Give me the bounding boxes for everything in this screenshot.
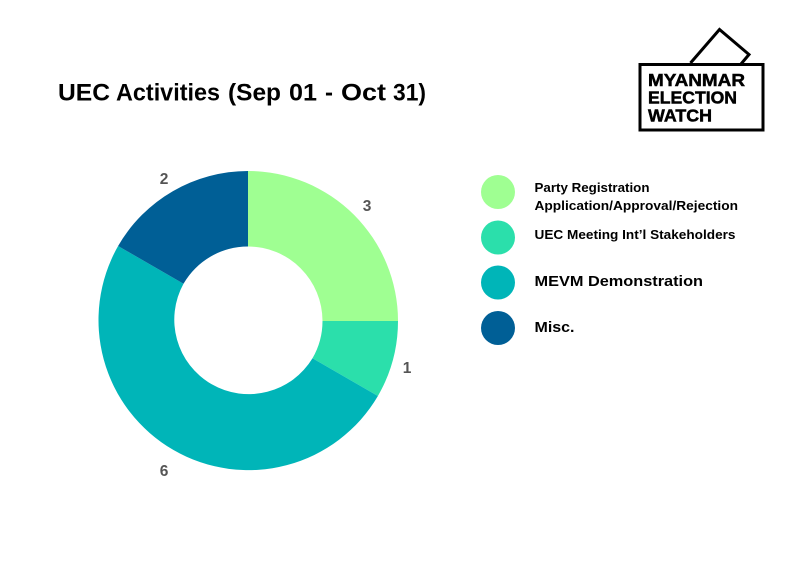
title: - [325, 80, 333, 106]
slice: MEVM Demonstration [98, 246, 378, 470]
value label: 3: 3 [363, 198, 372, 215]
legend swatch: UEC Meeting [481, 220, 515, 254]
slice: UEC Meeting [312, 321, 398, 396]
value label: 6: 6 [160, 463, 169, 480]
logo: Myanmar Election Watch: ELECTION [648, 88, 737, 108]
legend swatch: Misc [481, 311, 515, 345]
title: (Sep [228, 80, 281, 106]
value label: 1: 1 [403, 360, 412, 377]
slice: Party Registration [248, 171, 398, 321]
legend [481, 175, 738, 345]
logo: Myanmar Election Watch [640, 30, 763, 130]
legend text: Misc: Misc. [534, 319, 574, 336]
legend text: Party Registration: Application/Approval/Rejection [534, 198, 738, 213]
title: 31) [393, 80, 426, 106]
legend text: Party Registration: Party Registration [534, 180, 650, 195]
donut chart [98, 171, 398, 470]
legend swatch: MEVM [481, 266, 515, 300]
title: 01 [289, 80, 317, 106]
title: UEC [58, 80, 110, 106]
legend swatch: Party Registration [481, 175, 515, 209]
slice: Misc [118, 171, 248, 284]
title: Oct [341, 80, 386, 106]
logo: Myanmar Election Watch: MYANMAR [648, 70, 745, 90]
legend text: MEVM: MEVM Demonstration [534, 273, 703, 290]
legend text: UEC Meeting: UEC Meeting Int’l Stakeholders [534, 227, 736, 242]
title: Activities [116, 80, 220, 106]
logo: Myanmar Election Watch: WATCH [648, 106, 712, 126]
value label: 2: 2 [160, 171, 168, 188]
